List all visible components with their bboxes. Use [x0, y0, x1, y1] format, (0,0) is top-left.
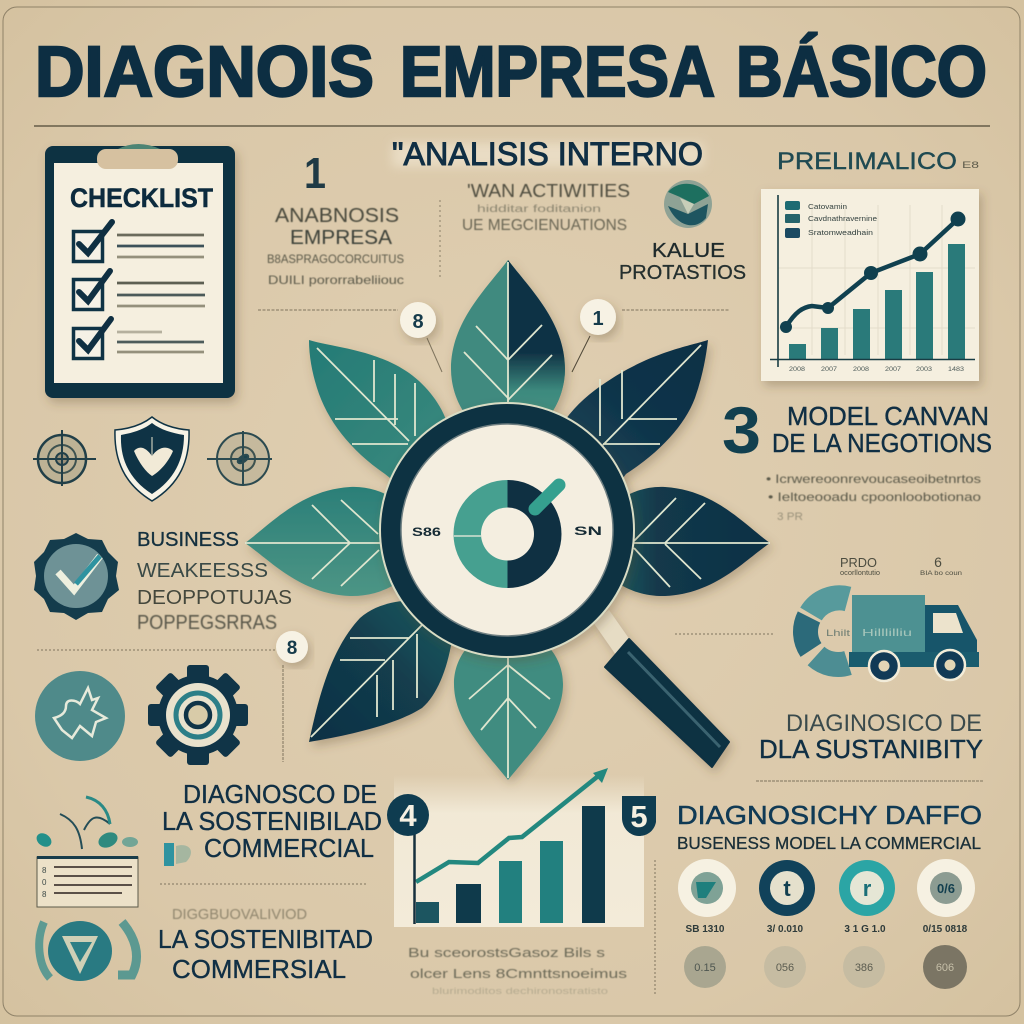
- icon: sprout with list box: [34, 797, 138, 907]
- circle labels: 3 1 G 1.0: [844, 924, 886, 935]
- chart legend: Sratomweadhain: [808, 228, 873, 237]
- icon: badge check: [34, 533, 119, 620]
- growth bars: [416, 806, 605, 923]
- icon: delivery truck with donut: [806, 595, 979, 681]
- text block: business weaknesses: POPPEGSRRAS: [137, 612, 277, 634]
- leaf: left: [245, 487, 420, 596]
- text block: la sostenibitad commercial: LA SOSTENIBITAD: [158, 926, 373, 954]
- truck donut: [806, 598, 848, 665]
- chart bars: [789, 244, 965, 359]
- text block: activities: hidditar foditanion: [477, 204, 601, 215]
- leaf: upper right: [565, 340, 708, 482]
- chart legend: [785, 201, 877, 238]
- text block: value protastios: [619, 240, 746, 284]
- text block: anabnosis empresa: [267, 204, 404, 287]
- text block: diagnosco de la sostenibilad: [162, 781, 382, 863]
- icon row: four circles: [678, 859, 975, 917]
- circle labels: SB 1310: [686, 924, 725, 935]
- icon: checkbox 2: [74, 271, 110, 310]
- chart legend: Cavdnathravernine: [808, 214, 877, 223]
- donut labels: SN: [574, 524, 602, 538]
- chart axis labels: 2008: [853, 366, 869, 373]
- text block: business weaknesses: WEAKEESSS: [137, 560, 268, 582]
- chart axis labels: 2007: [821, 366, 837, 373]
- chart axis labels: 2003: [916, 366, 932, 373]
- heading: diagnosis business model: [677, 800, 982, 853]
- text block: canvas bullets: • Ieltoeooadu cpoonloobotionao: [768, 490, 981, 504]
- truck body: [852, 595, 925, 653]
- small text: truck header labels: [840, 554, 962, 577]
- icon: target left: [33, 430, 96, 486]
- icon: compass right: [207, 431, 272, 486]
- heading: model canvas: MODEL CANVAN: [787, 403, 989, 431]
- callout: number 5: [622, 796, 656, 836]
- text block: chart caption: olcer Lens 8Cmnttsnoeimus: [410, 966, 628, 981]
- icon: teal funnel emblem: [39, 921, 137, 981]
- text block: diagnosco de la sostenibilad: DIAGNOSCO DE: [183, 781, 377, 809]
- text block: business weaknesses: BUSINESS: [137, 529, 239, 551]
- leaf: lower left: [309, 600, 452, 742]
- text block: chart caption: blurimoditos dechironostratisto: [432, 986, 608, 996]
- icon: sprout with list box: 8: [42, 866, 47, 875]
- icon: circle 1: [678, 859, 736, 917]
- icon: circle 3: [839, 860, 895, 916]
- donut chart: [454, 480, 562, 588]
- icon: circle 4: 0/6: [937, 881, 955, 896]
- leaf: right: [595, 487, 770, 596]
- trend arrow: [416, 768, 608, 882]
- chart trend line: [780, 212, 966, 333]
- circle labels: 0/15 0818: [923, 924, 968, 935]
- text block: diagnostico sustainability: DLA SUSTANIBITY: [759, 736, 983, 764]
- small text: truck header labels: BIA bo coun: [920, 570, 962, 577]
- icon: sprout with list box: 0: [42, 878, 47, 887]
- text block: diagnostico sustainability: [759, 710, 983, 764]
- icon: delivery truck with donut: Lhilt: [826, 628, 851, 638]
- text block: canvas bullets: 3 PR: [777, 511, 803, 523]
- text block: canvas bullets: • Icrwereoonrevoucaseoibetnrtos: [766, 472, 981, 486]
- text block: business weaknesses: [137, 529, 292, 634]
- title: DIAGNOIS: [35, 33, 374, 112]
- value circles: 386: [855, 962, 873, 974]
- text block: chart caption: [408, 945, 628, 996]
- text block: canvas bullets: [766, 472, 981, 523]
- value circles: [684, 945, 967, 989]
- icon: delivery truck with donut: Hilllilliu: [862, 628, 912, 639]
- text block: anabnosis empresa: EMPRESA: [290, 226, 392, 249]
- title: BÁSICO: [736, 33, 987, 112]
- icon: sprout with list box: 8: [42, 890, 47, 899]
- callout: number 4: [387, 794, 429, 836]
- callout: marker upper right: [580, 299, 616, 335]
- icon: circle 4: [917, 859, 975, 917]
- heading: diagnosis business model: DIAGNOSICHY DAFFO: [677, 800, 982, 830]
- checklist lines: [117, 235, 205, 352]
- icon: globe: [664, 180, 712, 228]
- small text: truck header labels: ocorllontutio: [840, 570, 880, 577]
- text block: value protastios: PROTASTIOS: [619, 262, 746, 284]
- chart: growth bars: [394, 768, 644, 927]
- icon: small teal mark: [164, 843, 191, 866]
- title: EMPRESA: [400, 33, 715, 112]
- text block: business weaknesses: DEOPPOTUJAS: [137, 587, 292, 609]
- text block: anabnosis empresa: B8ASPRAGOCORCUITUS: [267, 252, 404, 266]
- callout dividers and connectors: [37, 310, 983, 995]
- text block: activities: [462, 181, 630, 234]
- icon: shield: [115, 417, 189, 501]
- icon: checkbox 3: [74, 319, 111, 358]
- title: [35, 33, 987, 112]
- heading: model canvas: [772, 403, 992, 458]
- icon: magnifying glass: [380, 403, 729, 767]
- leaf: top: [451, 260, 565, 437]
- text block: activities: UE MEGCIENUATIONS: [462, 217, 627, 234]
- icon: circle 2: [759, 860, 815, 916]
- callout: marker left: 8: [287, 638, 297, 659]
- icon: circle 2: t: [783, 876, 791, 901]
- chart axis labels: 2008: [789, 366, 805, 373]
- panel: checklist clipboard: [45, 144, 235, 398]
- text block: diagnosco de la sostenibilad: LA SOSTENIBILAD: [162, 808, 382, 836]
- donut labels: [412, 524, 602, 539]
- heading: checklist: CHECKLIST: [70, 183, 213, 213]
- text block: la sostenibitad commercial: [158, 906, 373, 984]
- text block: la sostenibitad commercial: COMMERSIAL: [172, 956, 346, 984]
- heading: number 3: 3: [722, 393, 761, 467]
- text block: anabnosis empresa: ANABNOSIS: [275, 204, 399, 227]
- value circles: 056: [776, 962, 794, 974]
- central leaf flower: [245, 260, 770, 780]
- callout: marker left: [276, 631, 308, 663]
- text block: activities: 'WAN ACTIWITIES: [467, 181, 630, 201]
- callout: number 5: 5: [630, 799, 648, 834]
- heading: model canvas: DE LA NEGOTIONS: [772, 430, 992, 458]
- chart legend: Catovamin: [808, 202, 847, 211]
- text block: value protastios: KALUE: [652, 240, 725, 262]
- callout: number 4: 4: [399, 798, 417, 833]
- text block: la sostenibitad commercial: DIGGBUOVALIVIOD: [172, 906, 307, 923]
- heading: prelimalico: E8: [962, 160, 979, 170]
- text block: chart caption: Bu sceorostsGasoz Bils s: [408, 945, 606, 960]
- heading: prelimalico: PRELIMALICO: [777, 148, 957, 175]
- donut labels: S86: [412, 525, 441, 539]
- heading: number 1: 1: [304, 149, 326, 198]
- icon: checkbox 1: [74, 222, 112, 262]
- chart: preliminary bars and line: [761, 189, 979, 381]
- callout: marker upper right: 1: [592, 308, 604, 330]
- chart axis labels: [789, 366, 964, 373]
- text block: anabnosis empresa: DUILI pororrabeliiouc: [268, 273, 404, 287]
- icon: teal splash circle: [35, 671, 125, 761]
- icon: gear: [148, 665, 248, 765]
- circle labels: 3/ 0.010: [767, 924, 804, 935]
- callout: marker upper left: 8: [412, 311, 424, 333]
- text block: diagnostico sustainability: DIAGINOSICO DE: [786, 710, 982, 737]
- heading: diagnosis business model: BUSENESS MODEL LA COMMERCIAL: [677, 833, 981, 853]
- magnifier handle: [593, 610, 729, 767]
- icon: circle 3: r: [863, 876, 872, 901]
- chart axis labels: 1483: [948, 366, 964, 373]
- value circles: 0.15: [694, 962, 716, 974]
- circle labels: [686, 924, 968, 935]
- truck wheels: [869, 650, 965, 681]
- small text: truck header labels: PRDO: [840, 555, 877, 570]
- callout: marker upper left: [400, 302, 436, 338]
- small text: truck header labels: 6: [934, 554, 942, 570]
- leaf: upper left: [309, 340, 452, 482]
- value circles: 606: [936, 962, 954, 974]
- text block: diagnosco de la sostenibilad: COMMERCIAL: [204, 835, 374, 863]
- heading: analisis interno: "ANALISIS INTERNO: [392, 136, 703, 172]
- leaf: bottom: [454, 630, 563, 780]
- chart axis labels: 2007: [885, 366, 901, 373]
